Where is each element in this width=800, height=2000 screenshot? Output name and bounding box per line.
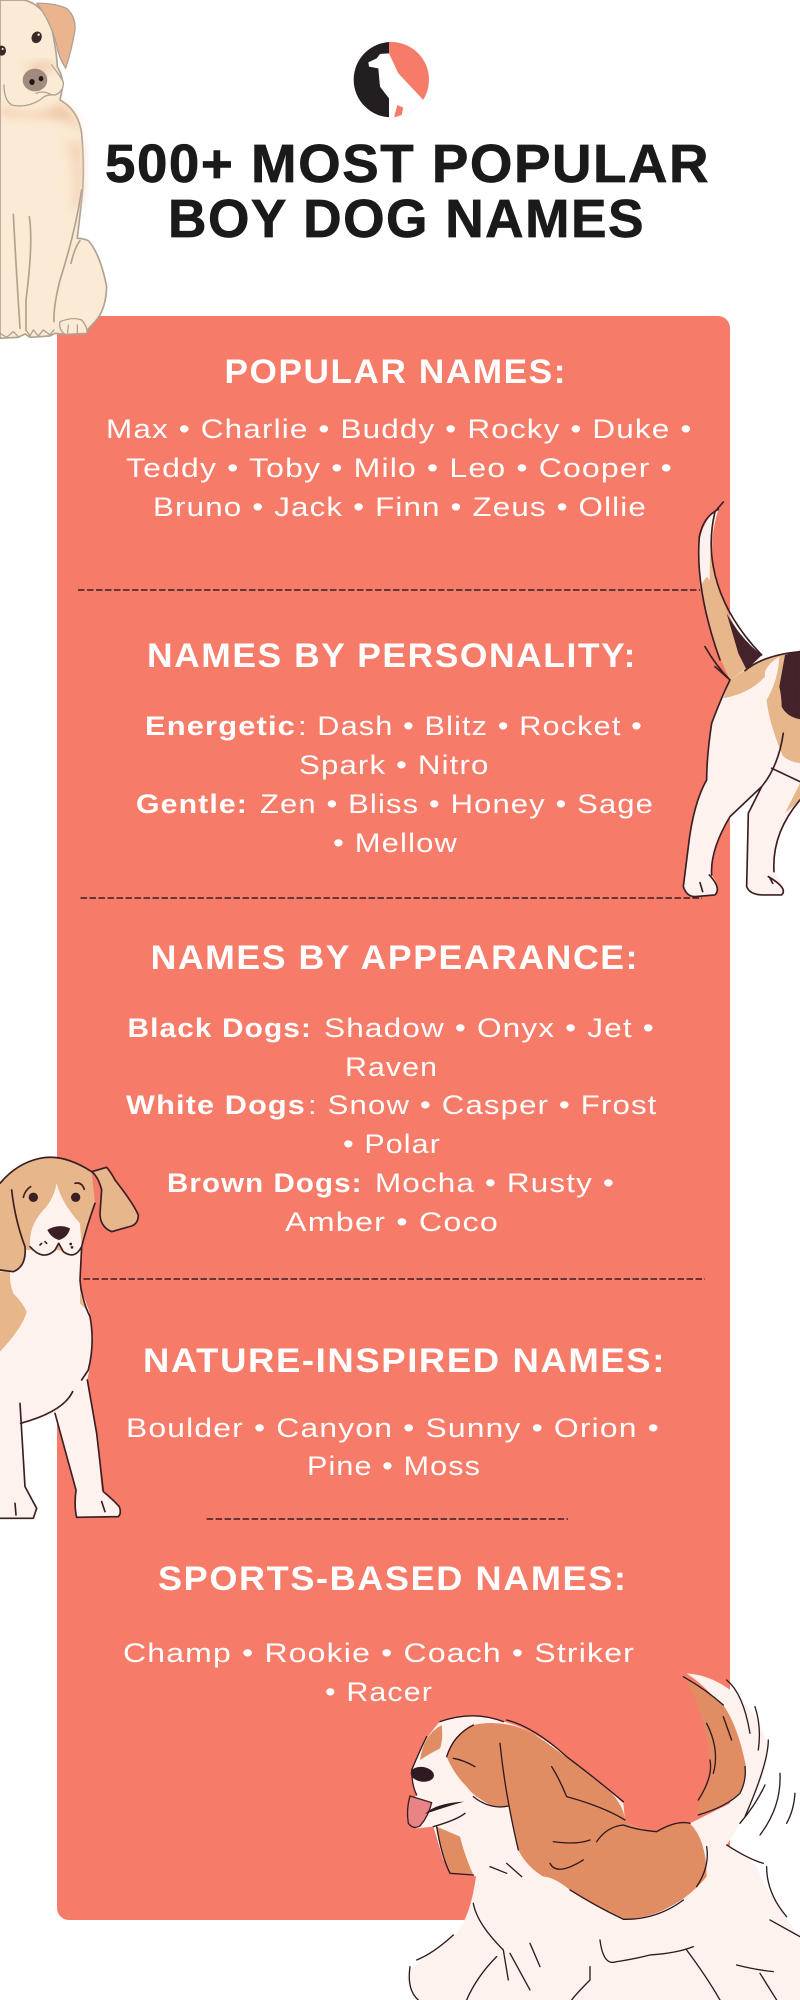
name list: appearance: Brown Dogs: (167, 1168, 363, 1198)
heading: nature: NATURE-INSPIRED NAMES: (143, 1342, 666, 1380)
heading: popular names: POPULAR NAMES: (224, 353, 567, 391)
title: BOY DOG NAMES (168, 189, 645, 249)
name list: appearance: : Snow • Casper • Frost (308, 1090, 658, 1120)
section: nature-inspired names (126, 1342, 666, 1481)
name list: popular: Max • Charlie • Buddy • Rocky • Duke • (106, 414, 692, 444)
name list: personality: Zen • Bliss • Honey • Sage (260, 789, 654, 819)
name list: sports: • Racer (325, 1677, 433, 1707)
heading: appearance: NAMES BY APPEARANCE: (151, 939, 639, 977)
illustration: beagle rear, right (683, 502, 800, 897)
name list: nature: Pine • Moss (307, 1451, 481, 1481)
name list: personality: Gentle: (136, 789, 248, 819)
section: sports-based names (123, 1560, 635, 1707)
heading: sports: SPORTS-BASED NAMES: (158, 1560, 628, 1598)
section: popular names (106, 353, 692, 522)
title (105, 134, 710, 249)
name list: personality: Spark • Nitro (299, 750, 490, 780)
name list: appearance: Mocha • Rusty • (375, 1168, 615, 1198)
name list: appearance: White Dogs (126, 1090, 306, 1120)
name list: popular: Bruno • Jack • Finn • Zeus • Ollie (153, 492, 647, 522)
illustration: yellow labrador, top left (0, 0, 107, 338)
name list: appearance: Amber • Coco (285, 1207, 499, 1237)
name list: nature (126, 1413, 660, 1481)
name list: personality: • Mellow (333, 828, 458, 858)
panel: salmon background (57, 316, 730, 1920)
name list: sports (123, 1638, 635, 1707)
name list: personality (136, 711, 654, 858)
name list: appearance: Shadow • Onyx • Jet • (324, 1013, 655, 1043)
section: names by personality (136, 637, 654, 858)
name list: appearance: • Polar (343, 1129, 441, 1159)
illustration: cavalier spaniel, bottom right (407, 1673, 800, 2000)
name list: nature: Boulder • Canyon • Sunny • Orion • (126, 1413, 660, 1443)
name list: personality: Energetic (145, 711, 296, 741)
heading: personality: NAMES BY PERSONALITY: (147, 637, 637, 675)
name list: appearance: Raven (345, 1052, 438, 1082)
illustration: beagle front, left (0, 1157, 138, 1518)
name list: personality: : Dash • Blitz • Rocket • (298, 711, 643, 741)
title: 500+ MOST POPULAR (105, 134, 710, 194)
name list: appearance: Black Dogs: (128, 1013, 312, 1043)
logo (354, 42, 429, 118)
section: names by appearance (126, 939, 658, 1237)
name list: appearance (126, 1013, 658, 1237)
name list: popular: Teddy • Toby • Milo • Leo • Cooper • (126, 453, 673, 483)
name list: sports: Champ • Rookie • Coach • Striker (123, 1638, 635, 1668)
name list: popular (106, 414, 692, 522)
